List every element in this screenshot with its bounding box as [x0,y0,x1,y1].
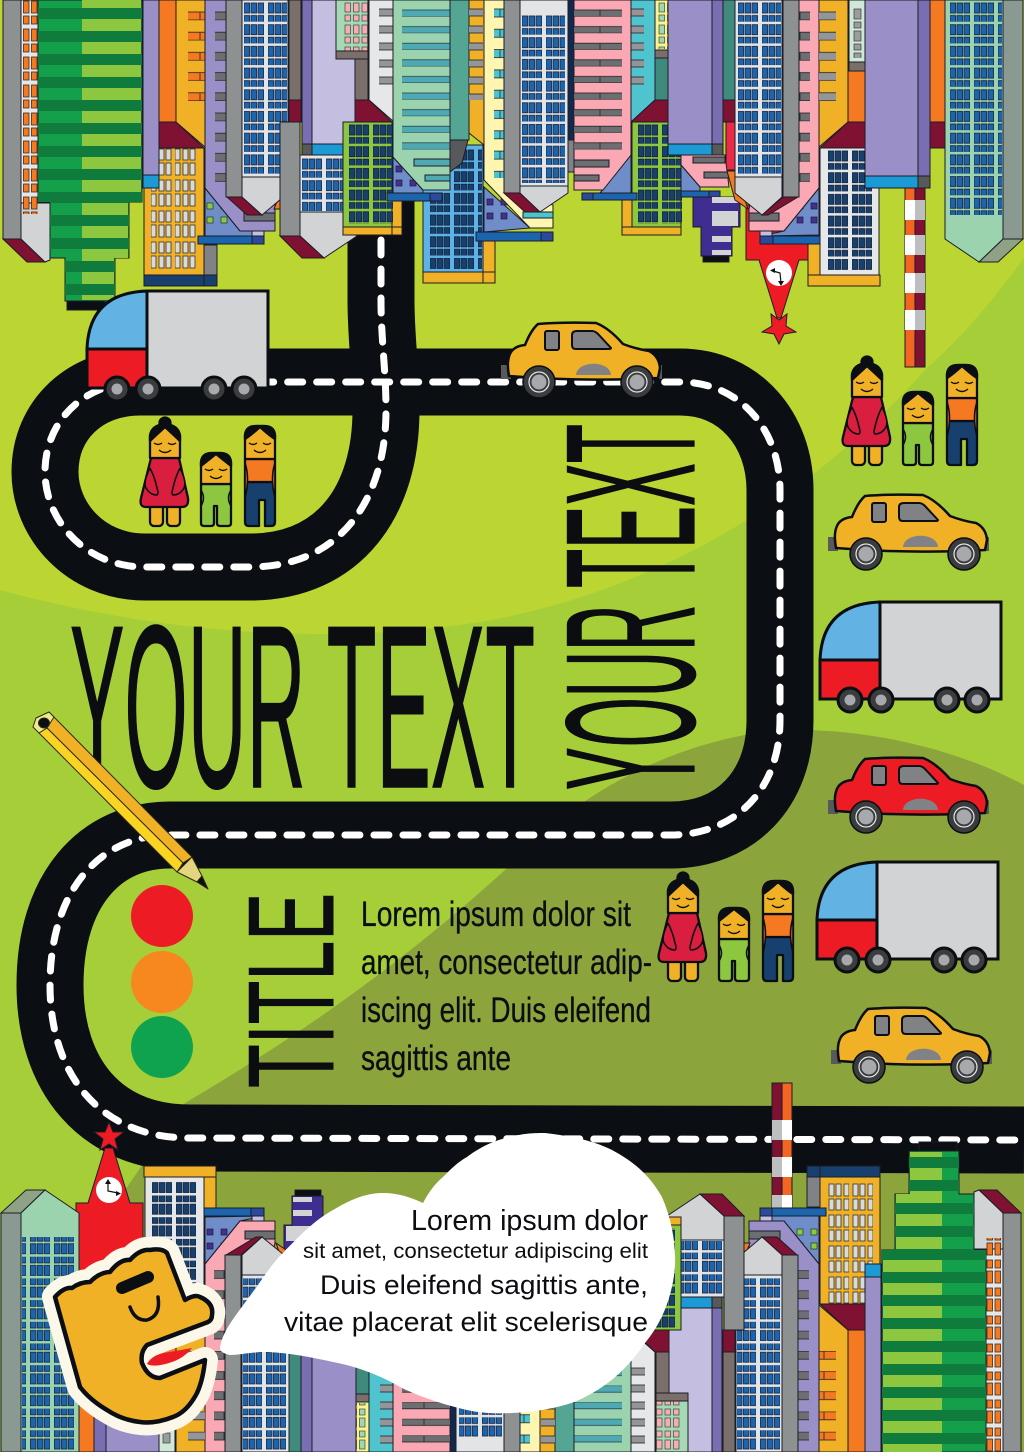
speech bubble text: vitae placerat elit scelerisque [284,1307,648,1337]
building: central lilac tower [205,0,275,236]
building: front blue window tower [504,0,574,212]
road surface [45,190,1024,1140]
speech bubble text [284,1205,648,1337]
family inside road loop [141,418,275,526]
speech bubble text: sit amet, consectetur adipiscing elit [303,1240,648,1263]
building: grey left tower [3,0,50,262]
family middle [659,872,793,981]
building: dark teal strips [655,0,735,170]
car on top road [501,323,662,398]
building: pale lilac tower [302,0,355,155]
yellow car right lower [831,1008,992,1083]
road [45,190,1024,1140]
top city skyline [3,0,1023,310]
bottom red clock tower [76,1122,143,1452]
building: lilac large tower [668,0,723,155]
body text block: iscing elit. Duis eleifend [361,991,651,1030]
truck top road [87,291,268,401]
building: white navy tower [808,148,880,286]
bottom chimney [772,1083,792,1264]
building: yellow bar wedge [819,0,865,148]
building: blue low block [198,188,264,244]
building: lilac right tower [865,0,945,188]
body text block: amet, consectetur adip- [361,943,652,982]
building: small low block 3 [476,187,553,241]
heading: title: TITLE [223,893,359,1088]
building: cream tower [484,0,553,228]
building: green stepped tower shadow [67,298,105,310]
building: grey low tower [280,122,357,258]
background: olive hill [125,730,1024,1452]
bottom city skyline [1,1142,1021,1452]
speech bubble text: Duis eleifend sagittis ante, [320,1270,648,1300]
red car right [828,758,989,833]
building: orange wedge [727,171,748,209]
building: lilac side strip [143,0,159,188]
building: big mint tower [393,0,469,190]
truck right upper [820,602,1001,712]
building: mint small block [336,0,370,100]
top chimney [905,186,925,367]
building: cyan bar block [631,0,655,122]
building: sky blue block [423,145,495,283]
building: pink wing tower [749,0,825,244]
building: yellow grey strip [469,0,484,145]
building: white bar block [355,0,393,122]
building: green navy-window block 2 [622,100,682,235]
top red clock tower [746,205,808,344]
traffic light circles [131,885,193,1078]
building: green stepped tower [38,0,142,301]
body text block: sagittis ante [361,1039,511,1078]
building: green navy-window block [343,122,402,235]
family top right [843,356,977,465]
building: blue window tower [226,0,288,215]
building: pink bar tower [574,0,631,190]
building: orange and yellow block [144,0,217,286]
building: pale mint small block [849,0,888,71]
yellow car right [828,495,989,570]
icon: hand mascot [55,1249,212,1422]
building: small pink block [681,155,729,197]
body text block [361,895,652,1078]
icon: pencil [33,712,208,889]
building: dark purple tower [693,197,740,262]
speech bubble text: Lorem ipsum dolor [411,1205,648,1237]
building: blue low block 2 [387,157,442,201]
speech bubble [220,1133,675,1413]
building: mint right tower [945,0,1023,262]
building: brown, maroon and red strip [274,0,301,209]
building: front window tower 3 [735,0,799,215]
building: blue wedge [582,155,637,200]
truck right lower [817,862,998,972]
road centre dashes [45,240,1024,1140]
body text block: Lorem ipsum dolor sit [361,895,631,934]
building: pale yellow small block [655,0,688,58]
